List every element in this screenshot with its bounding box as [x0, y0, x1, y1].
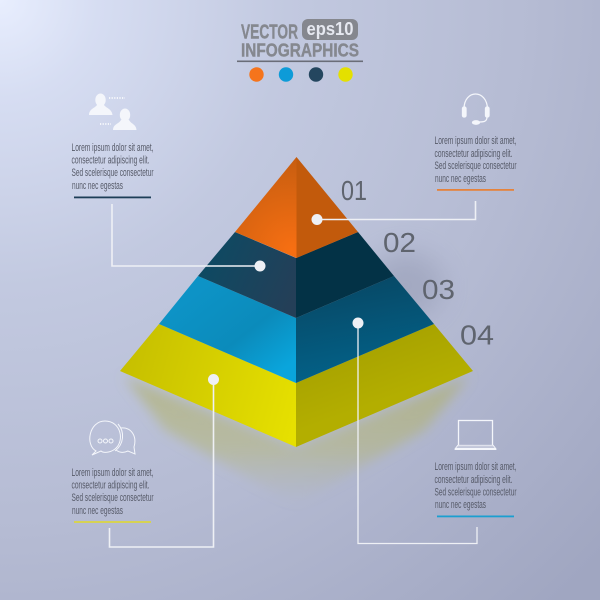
panel: top right [434, 94, 517, 191]
colour legend dots [249, 67, 353, 82]
connector 03 [352, 318, 477, 544]
pyramid reflection [124, 376, 469, 505]
panel: bottom right [434, 420, 517, 517]
badge: eps10: eps10 [306, 19, 354, 39]
title: infographics: INFOGRAPHICS [241, 40, 359, 60]
icon: people [89, 94, 136, 130]
text block: Lorem ipsum dolor sit amet, [434, 135, 516, 147]
text block: nunc nec egestas [435, 499, 486, 511]
panel: bottom left [72, 421, 154, 523]
text block: Sed scelerisque consectetur [434, 486, 517, 498]
underline [74, 521, 151, 523]
number 01: 01 [341, 175, 367, 206]
text block: nunc nec egestas [435, 173, 486, 185]
underline [437, 516, 514, 517]
underline [74, 196, 151, 198]
text block: Lorem ipsum dolor sit amet, [72, 142, 154, 154]
connector 04 [110, 374, 219, 547]
text block: nunc nec egestas [72, 505, 123, 517]
panel: top left [72, 94, 154, 198]
text block: consectetur adipiscing elit. [72, 480, 150, 492]
icon: headset [462, 94, 489, 124]
number 02: 02 [383, 227, 416, 258]
text block: Sed scelerisque consectetur [72, 492, 154, 504]
underline [437, 189, 514, 191]
tier 04 yellow [120, 324, 473, 447]
title rule [237, 60, 363, 62]
title block [237, 19, 363, 82]
text block: nunc nec egestas [72, 180, 123, 192]
text block: Sed scelerisque consectetur [434, 160, 517, 172]
number labels [341, 175, 494, 350]
text block: Lorem ipsum dolor sit amet, [434, 461, 516, 473]
pyramid cast shadow [367, 251, 443, 319]
icon: speech bubbles [90, 421, 135, 455]
tier 02 navy [198, 232, 394, 318]
tier 03 blue [159, 276, 434, 383]
tier 01 orange [235, 157, 358, 258]
pyramid [120, 157, 473, 447]
text block: consectetur adipiscing elit. [434, 474, 512, 486]
text block: Sed scelerisque consectetur [72, 167, 154, 179]
text block: consectetur adipiscing elit. [434, 148, 512, 160]
text block: Lorem ipsum dolor sit amet, [72, 467, 154, 479]
title: vector: VECTOR [241, 22, 298, 44]
connector 01 [312, 201, 476, 225]
connector 02 [112, 204, 266, 272]
number 04: 04 [460, 320, 494, 350]
text block: consectetur adipiscing elit. [72, 154, 150, 166]
number 03: 03 [422, 274, 455, 305]
icon: laptop [455, 420, 496, 449]
